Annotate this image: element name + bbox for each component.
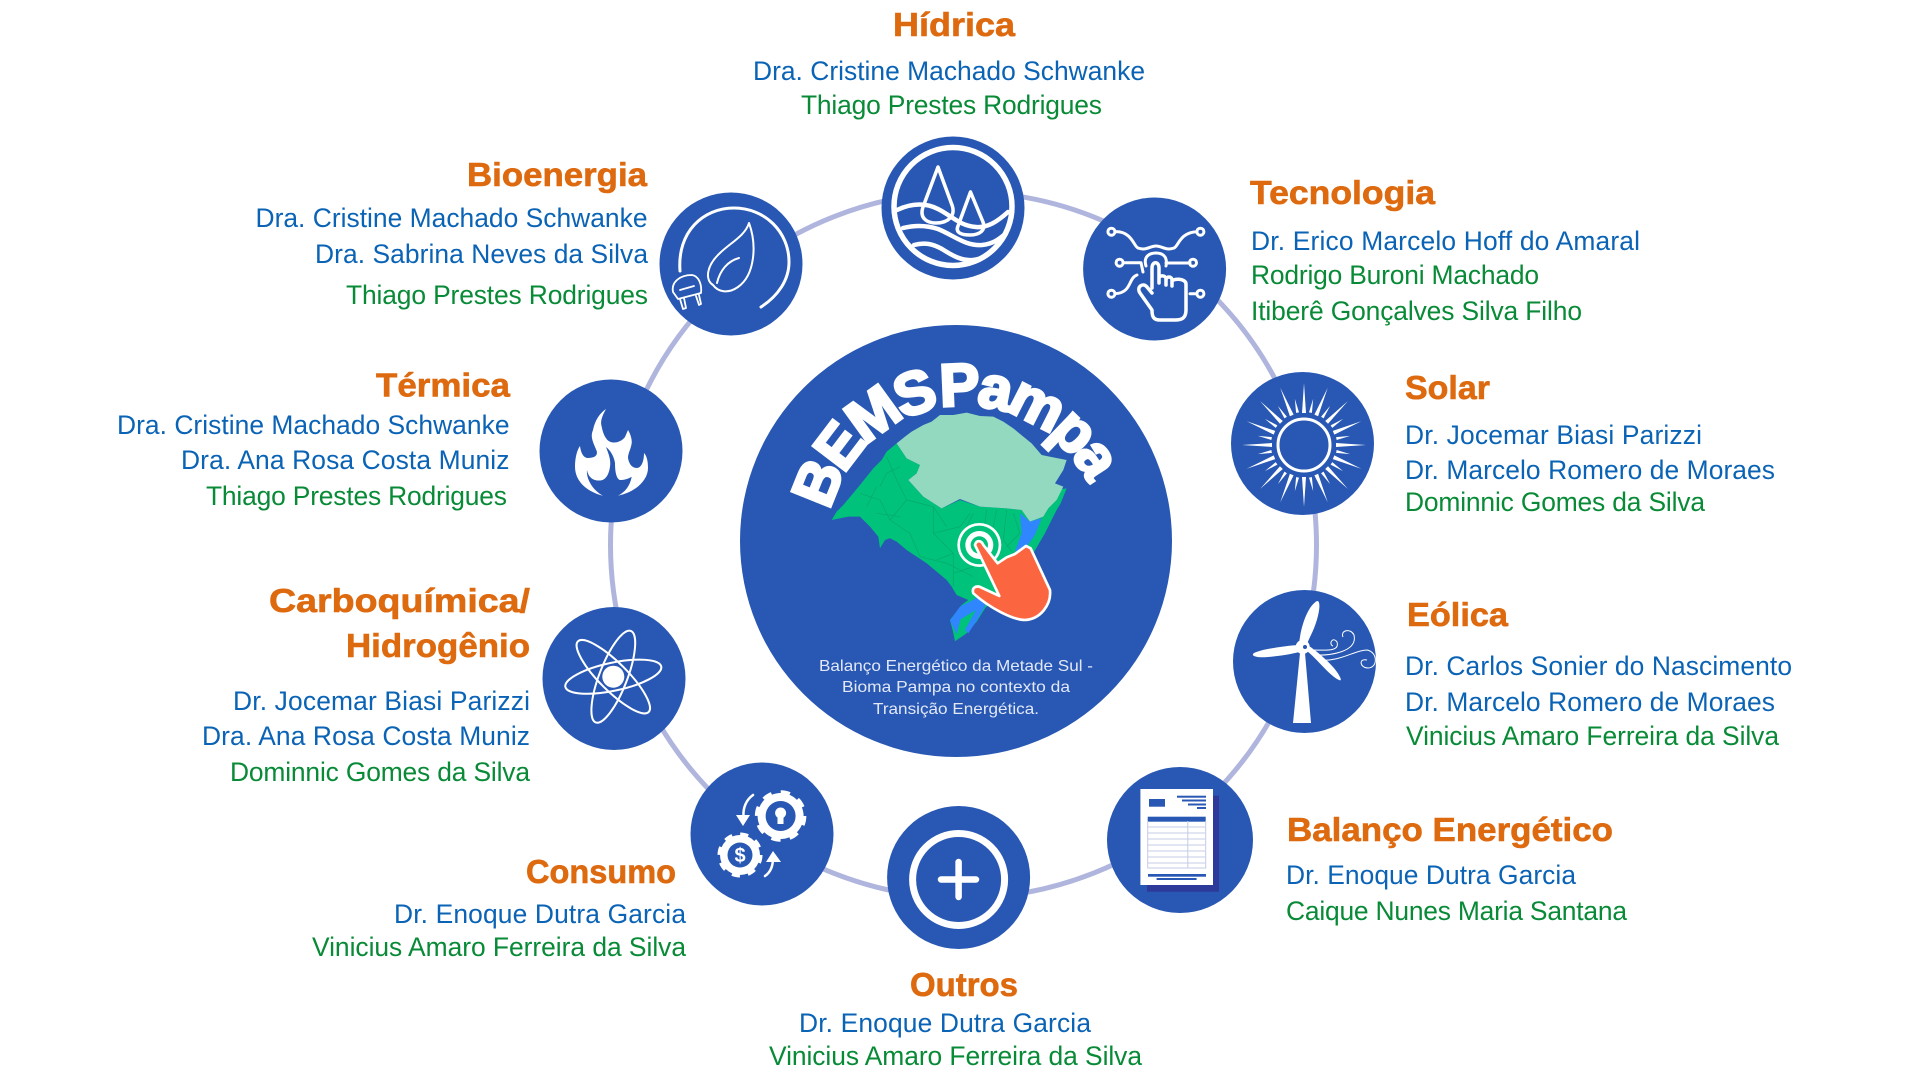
researcher names: Dr. Marcelo Romero de Moraes [1405,455,1775,485]
researcher names: Dra. Cristine Machado Schwanke [117,410,510,440]
icon: Outros plus sign [887,806,1030,949]
researcher names: Thiago Prestes Rodrigues [206,481,507,511]
researcher names: Dr. Carlos Sonier do Nascimento [1405,651,1792,681]
badge caption: Transição Energética. [873,701,1039,718]
heading: Carboquímica/Hidrogênio: Hidrogênio [346,627,530,664]
map region: northern half [897,413,1067,522]
researcher names: Rodrigo Buroni Machado [1251,260,1539,290]
heading: Carboquímica/Hidrogênio [269,582,530,664]
map: municipal borders [860,457,1020,587]
badge background circle [740,325,1172,757]
map region: southern half [832,443,1067,641]
researcher names: Dr. Jocemar Biasi Parizzi [233,686,530,716]
researcher names [1405,420,1775,517]
researcher names [1286,860,1627,926]
heading: Térmica: Térmica [376,367,511,404]
text: Consumo [312,853,686,962]
researcher names: Dra. Ana Rosa Costa Muniz [181,445,510,475]
icon: Tecnologia touch circuit [1083,198,1226,340]
icon: coral pointing hand [973,541,1050,620]
heading: Carboquímica/Hidrogênio: Carboquímica/ [269,582,530,619]
researcher names: Itiberê Gonçalves Silva Filho [1251,296,1582,326]
icon: Eólica wind turbine [1233,590,1376,733]
researcher names: Dr. Enoque Dutra Garcia [799,1008,1091,1038]
text: Outros [769,966,1142,1071]
researcher names [256,203,648,310]
researcher names: Dr. Enoque Dutra Garcia [394,899,686,929]
icon: Consumo gears: $ [734,845,746,867]
icon: Balanço Energético document [1107,767,1253,913]
researcher names: Dra. Cristine Machado Schwanke [256,203,648,233]
researcher names [769,1008,1142,1071]
icon: touch rings [957,523,1001,567]
text: Balanço Energético [1286,811,1627,926]
researcher names: Dr. Enoque Dutra Garcia [1286,860,1576,890]
researcher names [753,56,1145,120]
text: Carboquímica/Hidrogênio [202,582,530,787]
researcher names: Caique Nunes Maria Santana [1286,896,1627,926]
researcher names: Dra. Ana Rosa Costa Muniz [202,721,530,751]
icon: Térmica flame [540,380,682,522]
researcher names: Dr. Jocemar Biasi Parizzi [1405,420,1702,450]
badge caption: Balanço Energético da Metade Sul - [819,658,1093,675]
researcher names [202,686,530,787]
text: Hídrica [753,6,1145,120]
heading: Outros: Outros [910,966,1018,1003]
heading: Consumo: Consumo [526,853,676,890]
researcher names [117,410,510,511]
researcher names [1405,651,1792,751]
researcher names: Thiago Prestes Rodrigues [346,280,648,310]
title: BEMS Pampa on a curve: BEMS Pampa [790,362,1112,508]
icon: Bioenergia leaf and plug [660,192,802,336]
researcher names: Dominnic Gomes da Silva [230,757,530,787]
map: lagoons [950,513,1042,634]
heading: Hídrica: Hídrica [893,6,1016,43]
icon: Consumo gears [690,762,834,906]
heading: Eólica: Eólica [1407,596,1509,633]
researcher names: Dra. Sabrina Neves da Silva [315,239,648,269]
researcher names: Thiago Prestes Rodrigues [801,90,1102,120]
heading: Balanço Energético: Balanço Energético [1287,811,1613,848]
badge caption [819,658,1093,718]
icon: Solar sun [1231,372,1374,515]
researcher names: Vinicius Amaro Ferreira da Silva [312,932,686,962]
connecting ring [610,192,1316,898]
researcher names [1251,226,1640,326]
researcher names: Dra. Cristine Machado Schwanke [753,56,1145,86]
text: Solar [1405,369,1775,517]
researcher names: Dominnic Gomes da Silva [1405,487,1705,517]
panel: central BEMS Pampa badge [740,325,1172,757]
researcher names: Vinicius Amaro Ferreira da Silva [769,1041,1142,1071]
researcher names: Dr. Erico Marcelo Hoff do Amaral [1251,226,1640,256]
researcher names [312,899,686,962]
text: Eólica [1405,596,1792,751]
text: Tecnologia [1250,174,1640,326]
icon: Carboquímica atom [542,607,686,750]
icon: Hídrica water drops [882,136,1024,280]
badge caption: Bioma Pampa no contexto da [842,679,1070,696]
researcher names: Vinicius Amaro Ferreira da Silva [1406,721,1779,751]
heading: Solar: Solar [1405,369,1490,406]
heading: Bioenergia: Bioenergia [467,156,648,193]
text: Bioenergia [256,156,648,310]
researcher names: Dr. Marcelo Romero de Moraes [1405,687,1775,717]
map: Rio Grande do Sul with touching hand [832,413,1067,641]
heading: Tecnologia: Tecnologia [1250,174,1436,211]
text: Térmica [117,367,511,511]
